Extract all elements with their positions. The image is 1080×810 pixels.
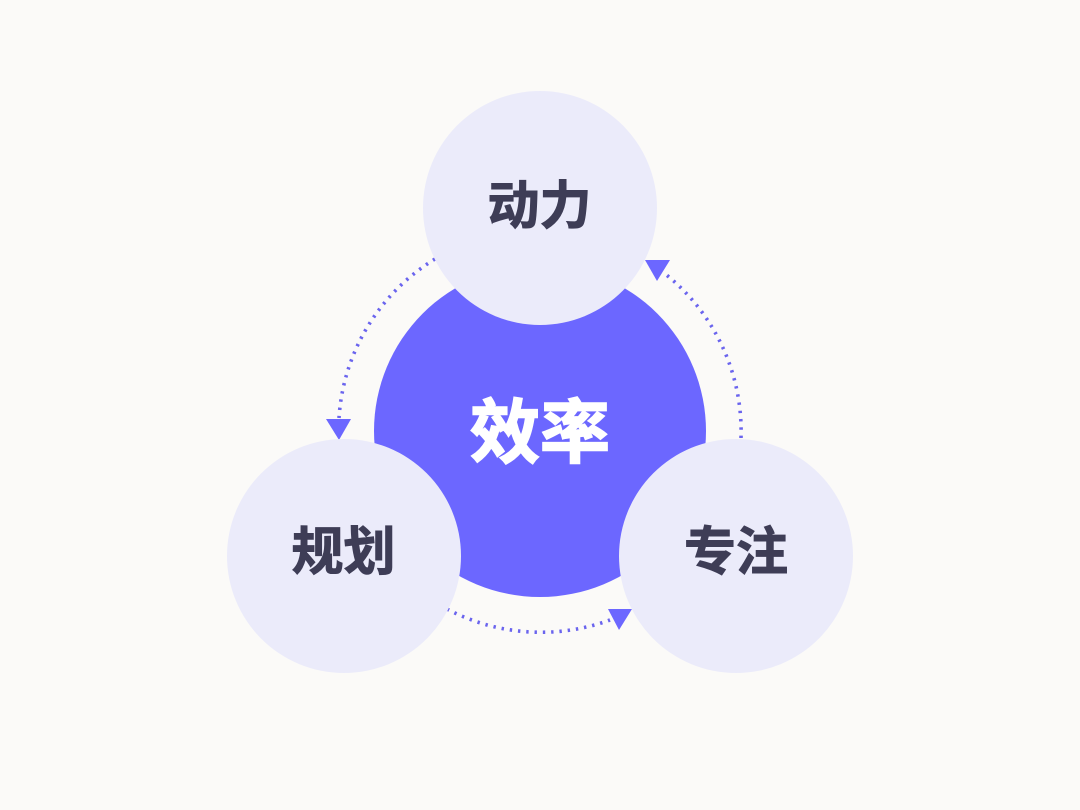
right circle: 专注: 专注 (684, 524, 788, 582)
center circle: 效率: 效率 (470, 394, 610, 472)
top circle: 动力: 动力 (487, 178, 592, 236)
arrow: 动力 to 规划 (326, 259, 435, 440)
left circle: 规划: 规划 (291, 524, 396, 582)
right circle: 专注 (619, 439, 853, 673)
top circle: 动力 (423, 91, 657, 325)
center circle: 效率 (374, 265, 706, 597)
arrow: 专注 to 动力 (645, 260, 741, 438)
arrow: 规划 to 专注 (447, 609, 632, 632)
left circle: 规划 (227, 439, 461, 673)
